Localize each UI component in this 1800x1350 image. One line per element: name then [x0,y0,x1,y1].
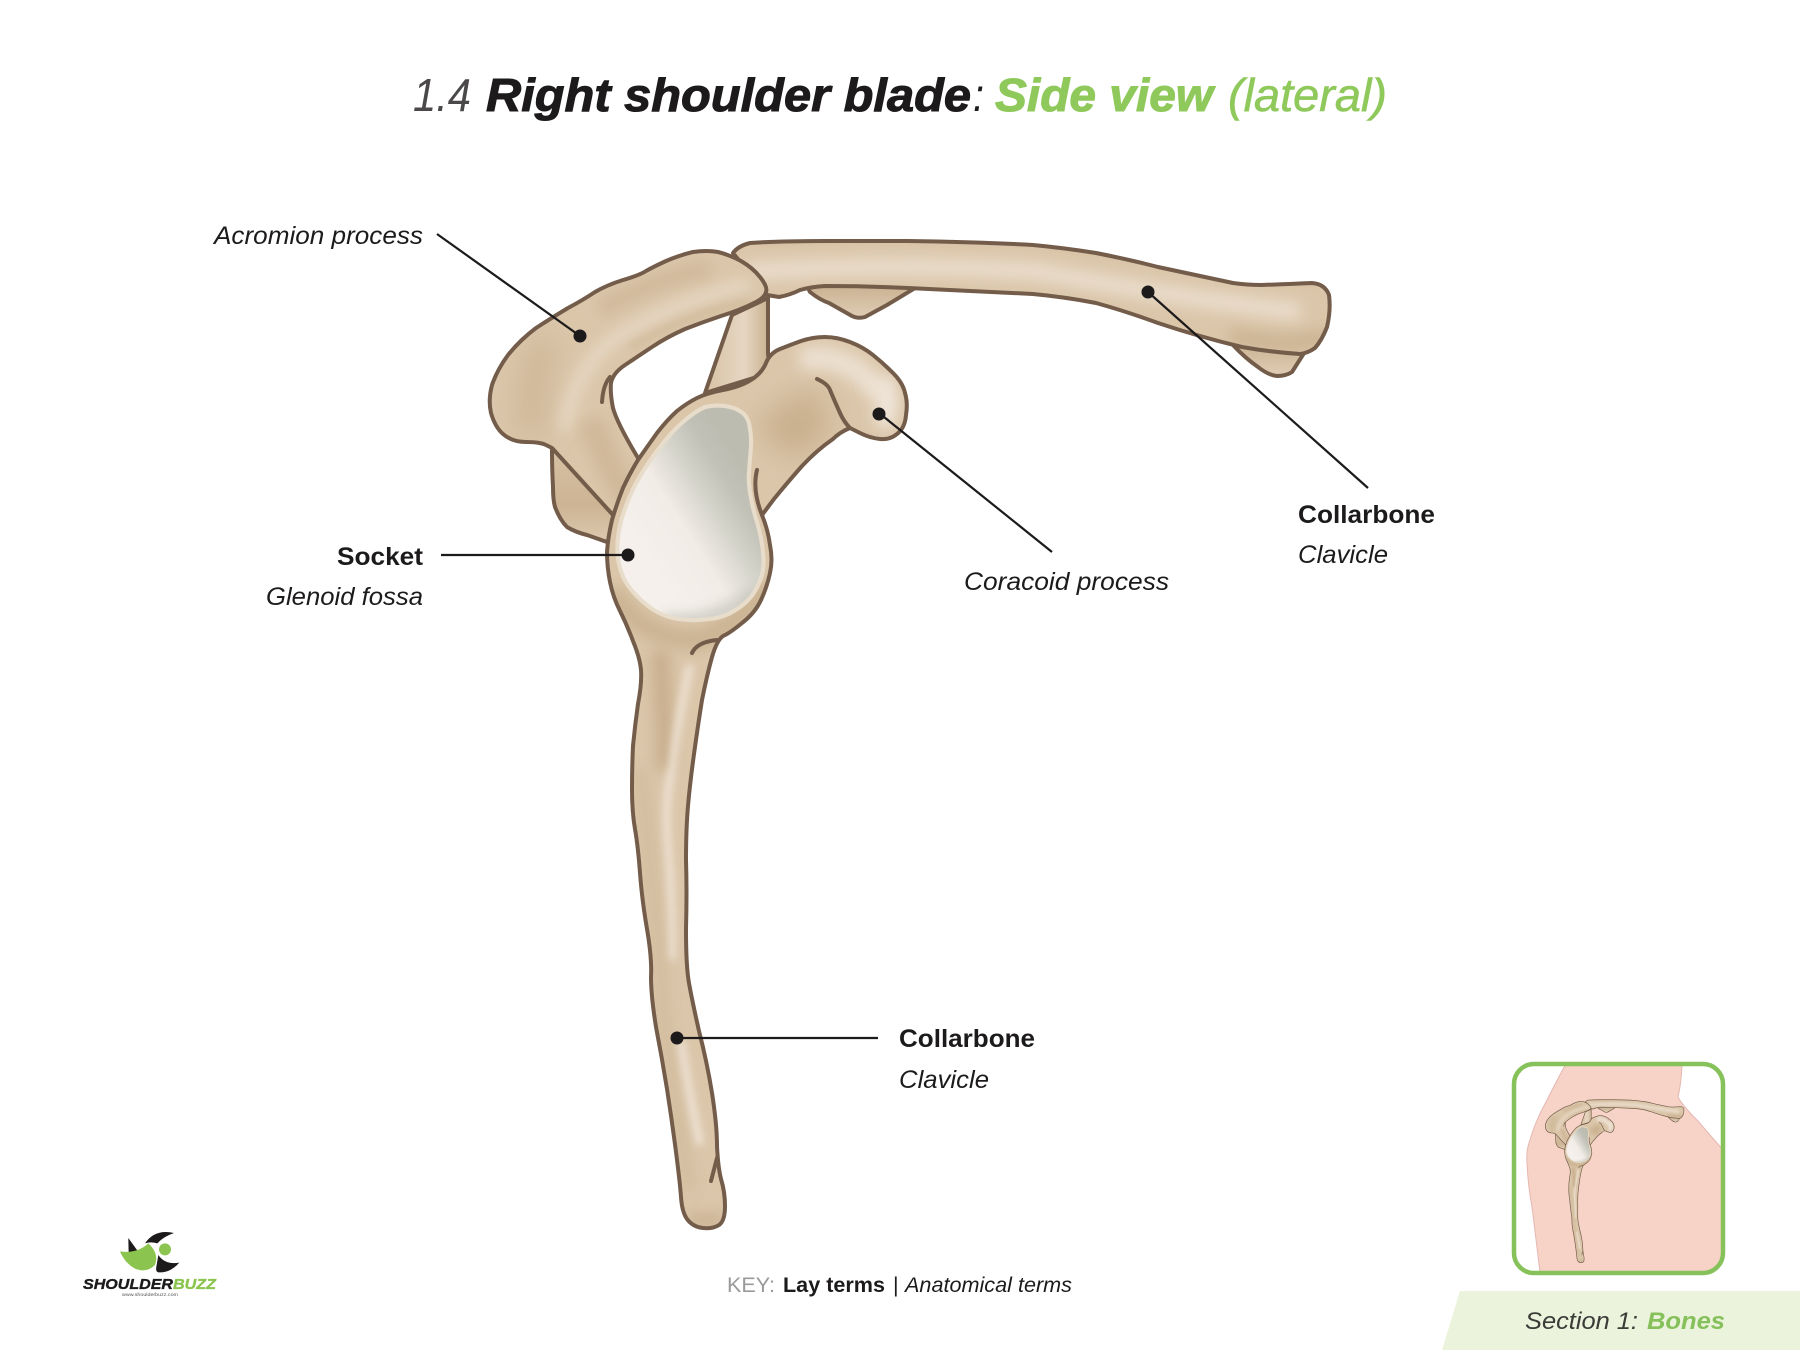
section tab: Section 1: [1525,1308,1638,1335]
title: : [973,69,984,121]
logo: ShoulderBuzz: www.shoulderbuzz.com [122,1292,178,1297]
bone: scapula body, shaft and coracoid process [607,337,907,1228]
leader: coracoid process [872,408,1052,552]
label: collarbone / clavicle upper: Collarbone [1298,501,1435,529]
label: coracoid process: Coracoid process [964,568,1169,596]
bone: acromion process [490,251,766,515]
bone: collarbone underside projections [804,280,1306,376]
icon: logo mark [120,1232,179,1272]
leader: socket [441,548,634,562]
title: 1.4 [413,69,471,121]
bone: flap under acromion [552,447,620,542]
inset: body locator [1514,1060,1730,1280]
key: KEY: [727,1273,775,1297]
key: | [893,1273,899,1297]
title: Side view [995,69,1216,121]
bone: collarbone end-on shaft [733,236,1330,354]
illustration: right shoulder blade and collarbone bones [490,236,1330,1228]
label: acromion process: Acromion process [212,222,423,250]
label: collarbone / clavicle upper [1298,501,1435,569]
logo: ShoulderBuzz: BUZZ [173,1277,217,1293]
logo: ShoulderBuzz: SHOULDER [83,1277,174,1293]
section tab [1442,1291,1800,1350]
key [727,1273,1072,1297]
leader: collarbone lower [670,1032,878,1044]
title: (lateral) [1228,69,1387,121]
inset: miniature bones [1545,1099,1684,1263]
title [413,69,1387,121]
bone: glenoid fossa cartilage [617,406,764,622]
label: socket / glenoid fossa: Glenoid fossa [266,583,423,611]
key: Anatomical terms [903,1273,1072,1297]
section tab: Bones [1647,1308,1725,1335]
logo: ShoulderBuzz [83,1232,217,1297]
leader: acromion process [437,234,586,342]
label: collarbone / clavicle upper: Clavicle [1298,541,1388,569]
inset: torso silhouette [1526,1066,1721,1271]
label: socket / glenoid fossa [266,543,424,611]
label: collarbone / clavicle lower: Clavicle [899,1066,989,1094]
label: collarbone / clavicle lower: Collarbone [899,1025,1035,1053]
label: collarbone / clavicle lower [899,1025,1035,1094]
bone: coracoclavicular strut behind [705,298,770,393]
label: socket / glenoid fossa: Socket [337,543,424,571]
title: Right shoulder blade [486,69,971,121]
inset: green frame [1514,1064,1723,1273]
leader: collarbone upper [1142,286,1368,488]
key: Lay terms [783,1273,885,1297]
